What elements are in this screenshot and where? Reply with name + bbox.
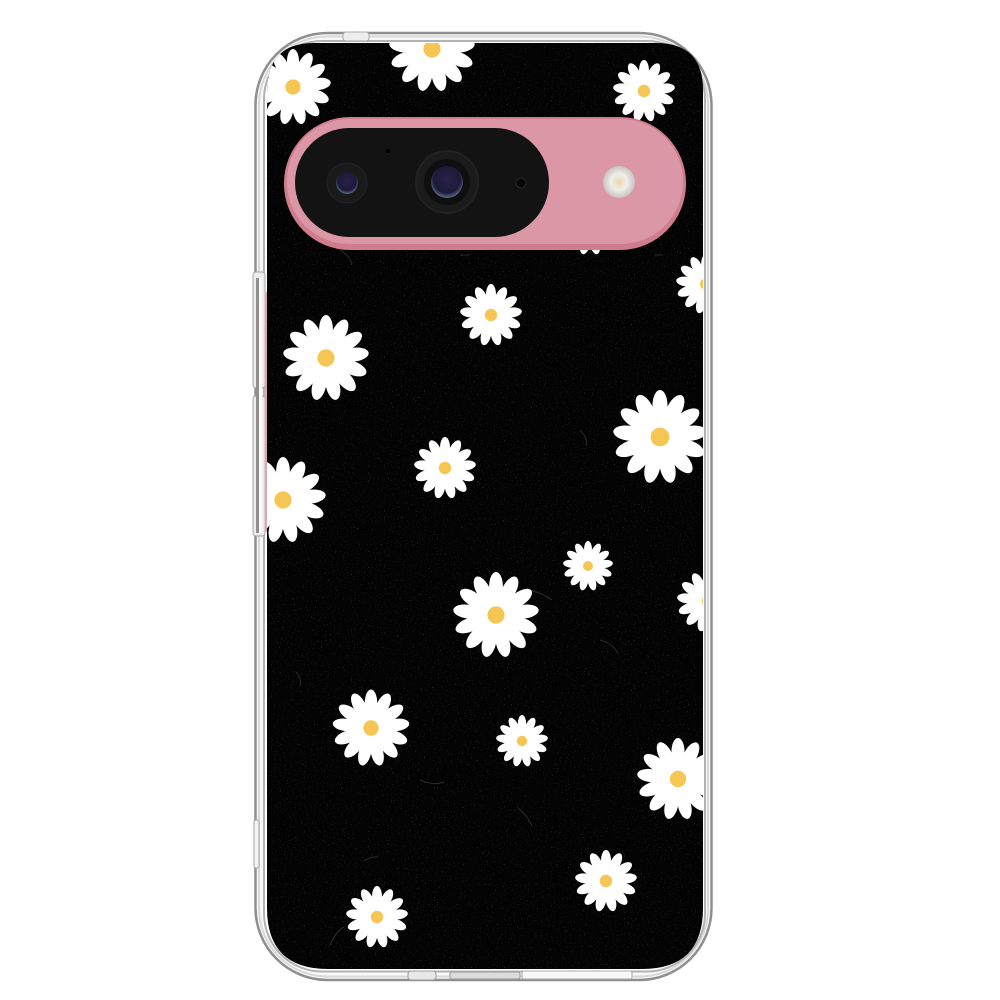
top and bottom case notches (343, 32, 632, 980)
phone case product illustration (252, 32, 713, 982)
large camera lens (416, 151, 478, 213)
microphone dot (386, 149, 390, 153)
daisy scatter pattern (267, 43, 703, 948)
side buttons on case left edge (253, 272, 268, 868)
pink camera bar (284, 117, 686, 250)
black camera window (295, 128, 549, 237)
black printed back panel (267, 43, 703, 969)
dust fibres on print (296, 250, 663, 945)
small camera lens (327, 163, 367, 203)
flash (603, 166, 635, 198)
clear case outer frame (256, 33, 712, 980)
sensor dot (516, 178, 526, 188)
